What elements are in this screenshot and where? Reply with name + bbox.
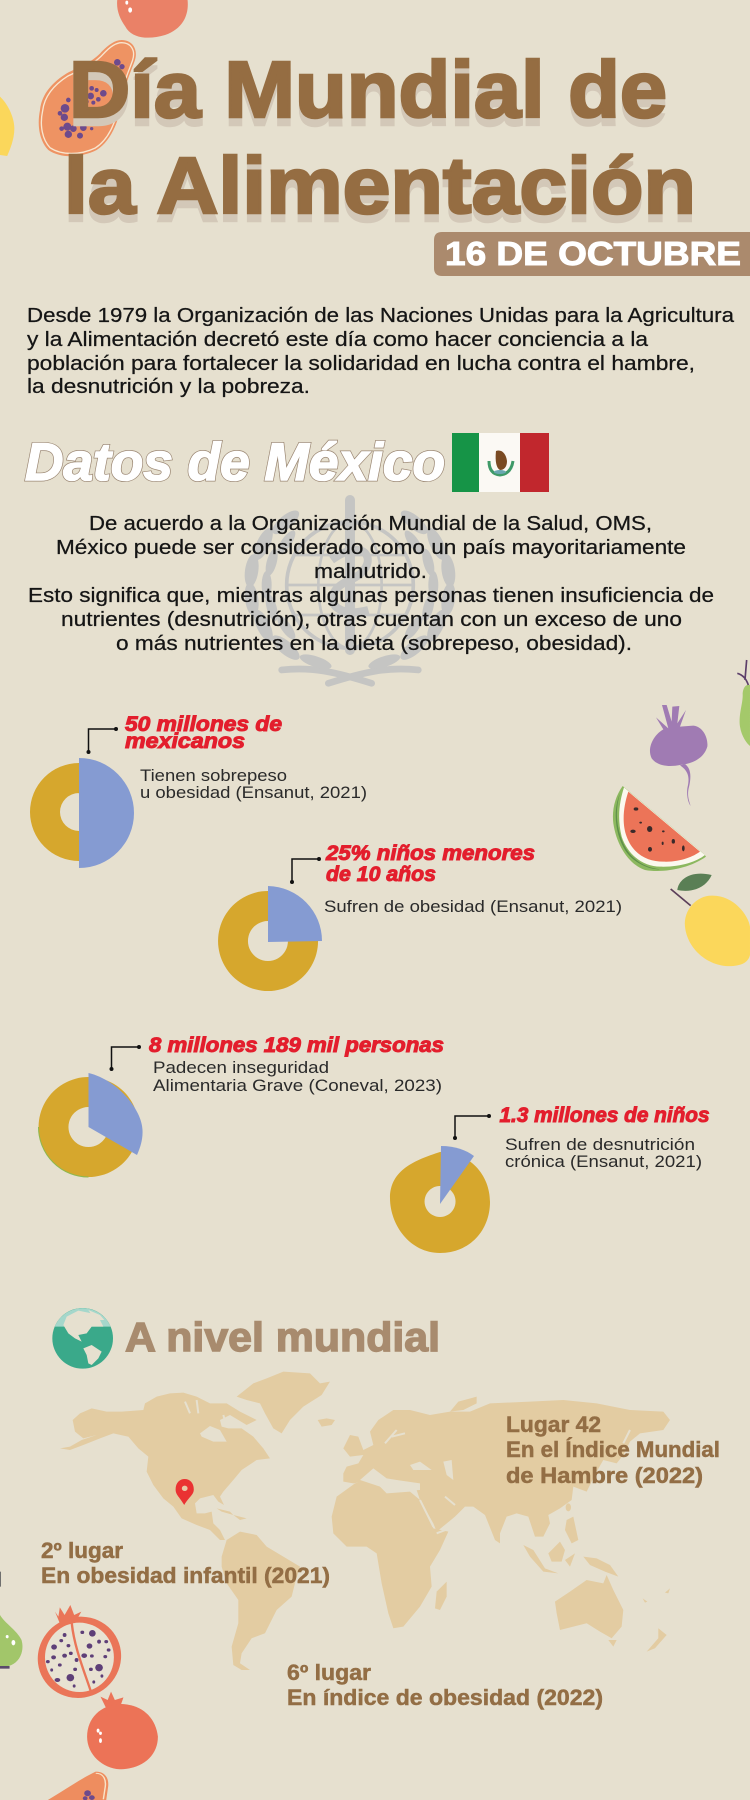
intro text: la desnutrición y la pobreza.: [27, 376, 310, 398]
stat: Lugar 42: de Hambre (2022): [506, 1463, 703, 1488]
stat: 6º lugar: En índice de obesidad (2022): [287, 1685, 603, 1710]
icon: lemon with leaf: [671, 874, 750, 966]
callout: 50 millones: [86, 713, 367, 802]
stat: 2º lugar: [41, 1538, 330, 1588]
world map: [60, 1372, 670, 1670]
callout: 50 millones: 50 millones de: [125, 713, 282, 736]
heading: A nivel mundial: A nivel mundial: [125, 1314, 440, 1360]
icon: location pin: [176, 1479, 194, 1505]
icon: beet: [650, 705, 707, 806]
intro text: Desde 1979 la Organización de las Naciones Unidas para la Agricultura: [27, 305, 735, 327]
chart: 1.3 millones: [390, 1146, 490, 1253]
icon: Mexican flag: [452, 433, 549, 492]
chart: 8 millones: [38, 1073, 143, 1177]
icon: lemon left edge: [0, 97, 14, 156]
icon: papaya bottom: [48, 1772, 108, 1800]
heading: Datos de México: Datos de México: [25, 433, 445, 492]
callout: 8 millones: [110, 1034, 444, 1095]
map: Eurasia, Africa and Oceania: [332, 1397, 670, 1652]
stat: 6º lugar: [287, 1660, 603, 1710]
icon: WHO emblem watermark: [243, 500, 457, 683]
title: la Alimentación: [64, 149, 696, 238]
chart: 25% niños: [218, 886, 322, 991]
icon: pomegranate top: [117, 0, 188, 38]
callout: 25% niños: [290, 842, 622, 916]
stat: 2º lugar: En obesidad infantil (2021): [41, 1563, 330, 1588]
heading: Datos de México: Datos de México: [25, 433, 445, 492]
map: Americas and Greenland: [60, 1372, 335, 1670]
intro text: [27, 305, 735, 398]
callout: 1.3 millones: 1.3 millones de niños: [500, 1104, 710, 1127]
callout: 25% niños: 25% niños menores: [325, 842, 535, 865]
date badge: 16 DE OCTUBRE: [445, 235, 741, 272]
stat: Lugar 42: En el Índice Mundial: [506, 1437, 720, 1462]
icon: pomegranate whole: [87, 1692, 158, 1769]
chart: 50 millones de mexicanos: [30, 758, 134, 868]
OMS text: Esto significa que, mientras algunas personas tienen insuficiencia de: [28, 585, 714, 607]
title: Día Mundial de: [69, 53, 667, 142]
callout: 8 millones: 8 millones 189 mil personas: [149, 1034, 444, 1057]
icon: pear lower left: [0, 1572, 22, 1669]
OMS text: México puede ser considerado como un país mayoritariamente: [56, 537, 686, 559]
title: [64, 45, 696, 238]
stat: Lugar 42: [506, 1412, 720, 1488]
stat: 2º lugar: 2º lugar: [41, 1538, 123, 1563]
icon: pear right edge: [737, 660, 750, 746]
title: la Alimentación: [64, 141, 696, 230]
OMS text: malnutrido.: [314, 561, 427, 583]
callout: 50 millones: Tienen sobrepeso: [140, 766, 287, 785]
callout: 8 millones: Alimentaria Grave (Coneval, 2023): [153, 1076, 442, 1095]
icon: globe: [52, 1308, 113, 1369]
stat: 6º lugar: 6º lugar: [287, 1660, 371, 1685]
callout: 25% niños: Sufren de obesidad (Ensanut, 2021): [324, 897, 622, 916]
icon: watermelon: [613, 786, 706, 871]
stat: Lugar 42: Lugar 42: [506, 1412, 601, 1437]
title: Día Mundial de: [69, 45, 667, 134]
callout: 1.3 millones: [453, 1104, 710, 1171]
OMS text: [28, 513, 714, 655]
callout: 1.3 millones: crónica (Ensanut, 2021): [505, 1152, 702, 1171]
OMS text: De acuerdo a la Organización Mundial de la Salud, OMS,: [89, 513, 652, 535]
icon: papaya top: [39, 40, 136, 156]
callout: 50 millones: mexicanos: [125, 730, 245, 753]
OMS text: o más nutrientes en la dieta (sobrepeso, obesidad).: [116, 633, 632, 655]
callout: 50 millones: u obesidad (Ensanut, 2021): [140, 783, 367, 802]
callout: 8 millones: Padecen inseguridad: [153, 1058, 329, 1077]
intro text: población para fortalecer la solidaridad en lucha contra el hambre,: [27, 353, 695, 375]
icon: pomegranate half: [35, 1605, 124, 1699]
OMS text: nutrientes (desnutrición), otras cuentan con un exceso de uno: [61, 609, 682, 631]
callout: 25% niños: de 10 años: [326, 863, 436, 886]
callout: 1.3 millones: Sufren de desnutrición: [505, 1135, 695, 1154]
intro text: y la Alimentación decretó este día como hacer conciencia a la: [27, 329, 649, 351]
